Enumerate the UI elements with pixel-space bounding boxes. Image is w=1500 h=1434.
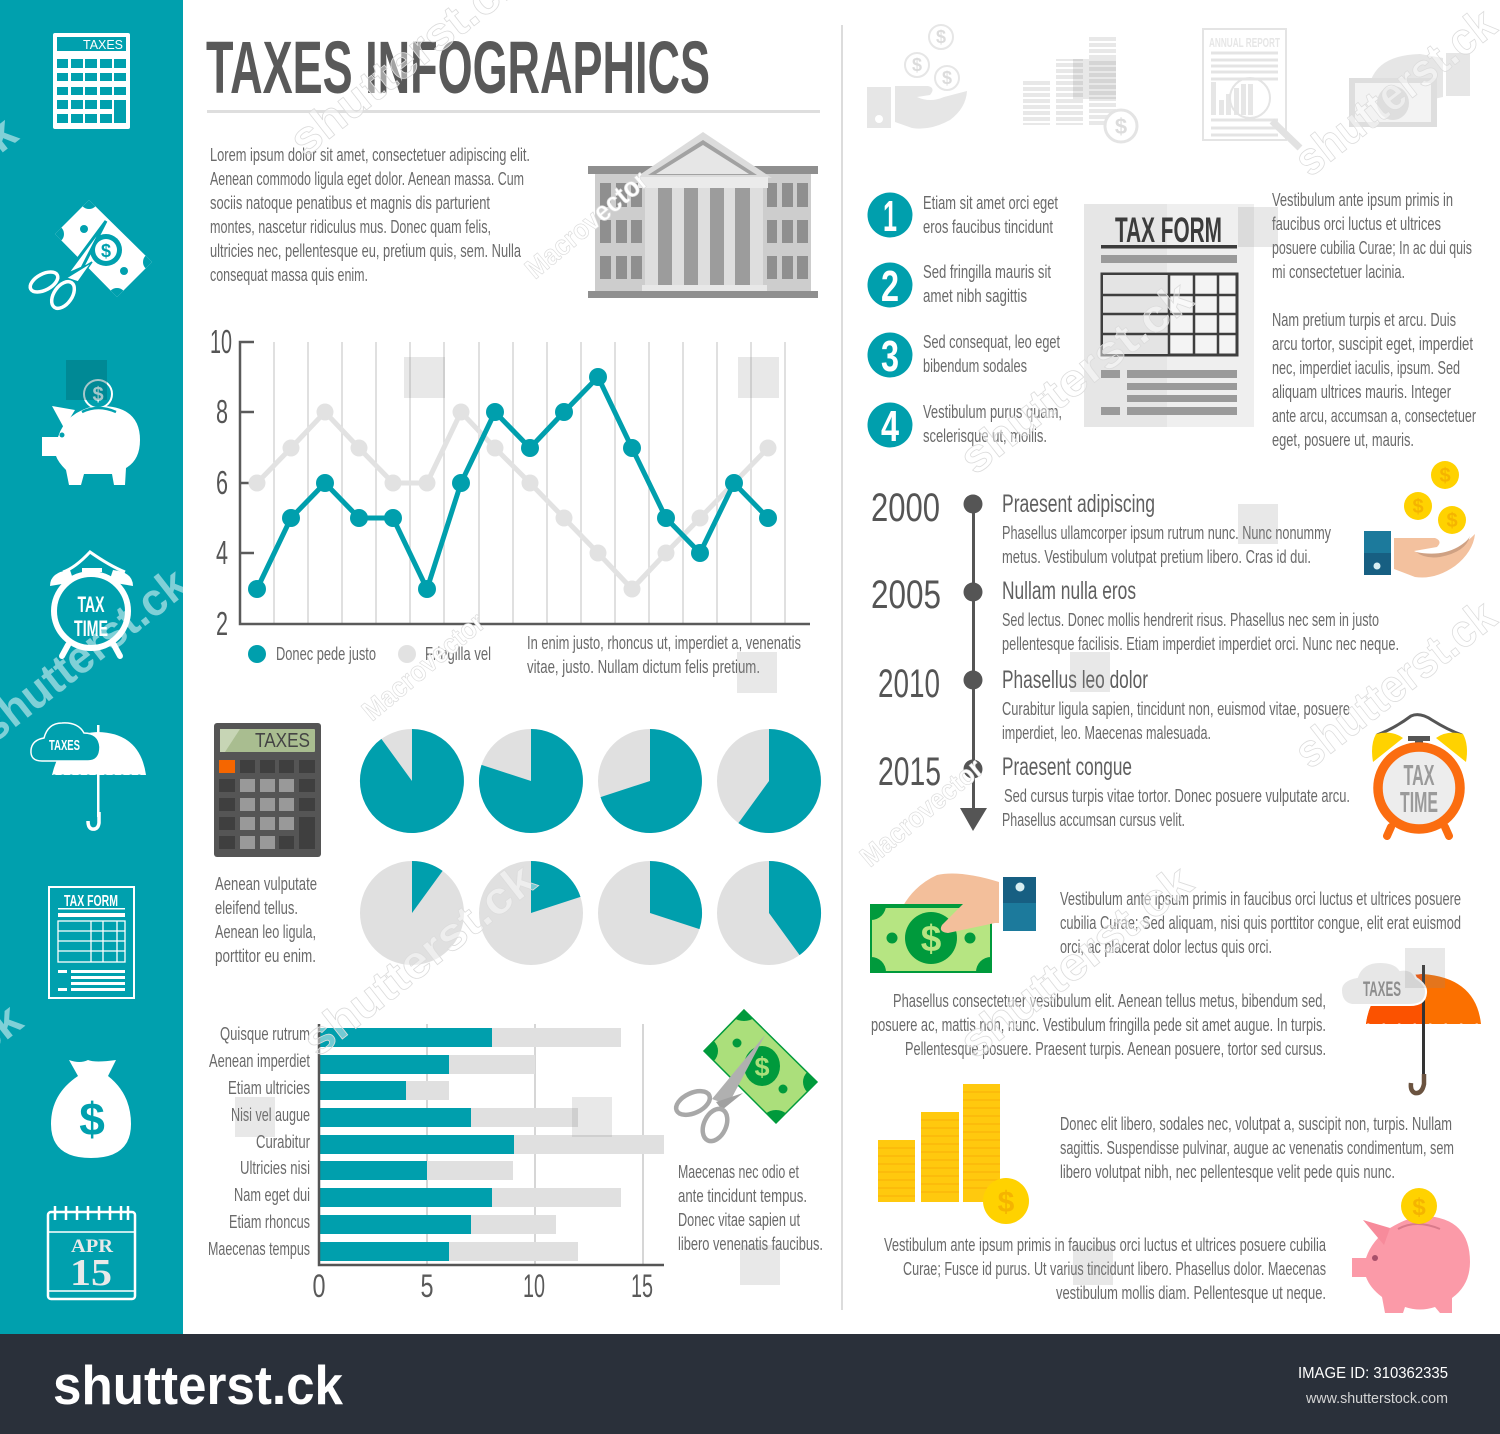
icon: orange umbrella with cloud	[1341, 962, 1481, 1093]
icon: money bag: $	[79, 1093, 105, 1145]
chart legend: Donec pede justo	[276, 644, 376, 664]
chart legend: Fringilla vel	[425, 644, 491, 664]
chart note: In enim justo, rhoncus ut, imperdiet a, venenatis	[527, 633, 801, 653]
timeline entry 2010: imperdiet, leo. Maecenas malesuada.	[1002, 723, 1211, 743]
bar labels: Maecenas tempus	[208, 1239, 310, 1259]
timeline entry 2000: metus. Vestibulum volutpat pretium libero. Cras id dui.	[1002, 547, 1311, 567]
item 2: amet nibh sagittis	[923, 286, 1027, 306]
watermark overlays: Macrovector	[854, 752, 989, 873]
bar labels: Etiam rhoncus	[229, 1212, 310, 1232]
faded icon row	[867, 25, 1470, 148]
icon: tax time clock: TAX	[78, 592, 105, 617]
banknote caption: ante tincidunt tempus.	[678, 1186, 807, 1206]
timeline entry 2000: Praesent adipiscing	[1002, 490, 1155, 518]
item 3: Sed consequat, leo eget	[923, 332, 1060, 352]
calculator caption: Aenean leo ligula,	[215, 922, 316, 942]
item 4: 4	[881, 402, 899, 451]
shutterstock logo: shutterst.ck	[53, 1354, 343, 1416]
icon: hand catching coins	[1364, 461, 1475, 578]
icon: scissors on green banknote: $	[754, 1052, 770, 1082]
intro paragraph: montes, nascetur ridiculus mus. Donec quam felis,	[210, 217, 491, 237]
intro paragraph: consequat massa quis enim.	[210, 265, 368, 285]
icon: april 15 calendar: 15	[70, 1252, 112, 1294]
timeline	[871, 486, 1399, 831]
timeline entry 2000: 2000	[871, 486, 940, 530]
bar labels: Ultricies nisi	[240, 1158, 310, 1178]
watermark overlays: shutterst.ck	[949, 270, 1202, 484]
icon: tax form document: TAX FORM	[1115, 211, 1222, 250]
right text column	[1272, 190, 1476, 450]
watermark overlays: Macrovector	[356, 606, 491, 727]
icon: tax time orange clock: TIME	[1400, 787, 1438, 819]
title: TAXES INFOGRAPHICS	[206, 26, 710, 109]
calculator caption: eleifend tellus.	[215, 898, 298, 918]
teal series	[248, 368, 777, 598]
y axis labels	[210, 323, 232, 642]
item 3	[868, 332, 1060, 381]
bar labels: Quisque rutrum	[220, 1024, 310, 1044]
icon: faded coin stacks	[1023, 37, 1137, 142]
right text column: eget, posuere ut, mauris.	[1272, 430, 1414, 450]
text block: umbrella: Phasellus consectetuer vestibulum elit. Aenean tellus metus, bibendum sed,	[893, 991, 1326, 1011]
text block: piggy bank: Vestibulum ante ipsum primis in faucibus orci luctus et ultrices posuere cubilia	[884, 1235, 1327, 1255]
text block: piggy bank: vestibulum mollis diam. Pellentesque ut neque.	[1056, 1283, 1326, 1303]
bar labels: Etiam ultricies	[228, 1078, 310, 1098]
line chart	[210, 323, 810, 642]
bar labels: Nam eget dui	[234, 1185, 310, 1205]
grey series	[248, 404, 776, 598]
bar labels: Curabitur	[256, 1132, 310, 1152]
timeline entry 2015: Sed cursus turpis vitae tortor. Donec posuere vulputate arcu.	[1004, 786, 1350, 806]
text block: piggy bank: Curae; Fusce id purus. Ut varius tincidunt libero. Phasellus dolor. Maecenas	[903, 1259, 1326, 1279]
timeline entry 2000: Phasellus ullamcorper ipsum rutrum nunc. Nunc nonummy	[1002, 523, 1331, 543]
intro paragraph: ultricies nec, pellentesque eu, pretium quis, sem. Nulla	[210, 241, 522, 261]
icon: hand catching coins: $	[1412, 496, 1424, 518]
icon: faded hand and money	[1349, 53, 1470, 127]
item 2	[868, 262, 1051, 311]
bar axis labels: 0	[312, 1268, 326, 1304]
calculator caption: porttitor eu enim.	[215, 946, 316, 966]
icon: government building	[588, 132, 818, 298]
intro paragraph: Lorem ipsum dolor sit amet, consectetuer adipiscing elit.	[210, 145, 530, 165]
icon: calculator	[214, 723, 321, 857]
icon: piggy bank with coin	[42, 380, 140, 485]
icon: hand catching coins: $	[1446, 510, 1458, 532]
icon: gold coin stacks: $	[998, 1186, 1015, 1219]
icon: umbrella with cloud: TAXES	[49, 737, 80, 754]
calculator caption	[215, 874, 317, 966]
item 3: bibendum sodales	[923, 356, 1027, 376]
bar labels: Nisi vel augue	[231, 1105, 310, 1125]
item 1: eros faucibus tincidunt	[923, 217, 1053, 237]
bar axis labels: 15	[631, 1268, 653, 1304]
chart note: vitae, justo. Nullam dictum felis pretium.	[527, 657, 760, 677]
bar labels	[208, 1024, 310, 1259]
item 4: Vestibulum purus quam,	[923, 402, 1062, 422]
icon: gold coin stacks	[878, 1084, 1029, 1224]
timeline entry 2010: Curabitur ligula sapien, tincidunt non, euismod vitae, posuere	[1002, 699, 1350, 719]
item 2: Sed fringilla mauris sit	[923, 262, 1051, 282]
icon: tax time clock	[50, 552, 133, 656]
intro paragraph: Aenean commodo ligula eget dolor. Aenean massa. Cum	[210, 169, 524, 189]
icon: faded hand with coins: $	[912, 55, 922, 75]
icon: tax form: TAX FORM	[64, 893, 118, 910]
timeline entry 2005: 2005	[871, 573, 941, 617]
y axis labels: 8	[216, 393, 228, 430]
timeline entry 2005: Nullam nulla eros	[1002, 577, 1136, 605]
y axis labels: 6	[216, 464, 228, 501]
item 4: scelerisque ut, mollis.	[923, 426, 1047, 446]
icon: money bag	[51, 1060, 131, 1158]
timeline entry 2005	[871, 573, 1399, 654]
icon: pink piggy bank: $	[1412, 1194, 1426, 1221]
text block: banknote: orci, ac placerat dolor lectus quis orci.	[1060, 937, 1272, 957]
timeline entry 2015	[878, 750, 1350, 830]
intro paragraph	[210, 145, 530, 285]
timeline entry 2015: Phasellus accumsan cursus velit.	[1002, 810, 1185, 830]
item 3: 3	[881, 332, 899, 381]
watermark overlays: shutterst.ck	[949, 854, 1202, 1068]
banknote caption	[678, 1162, 823, 1254]
item 4	[868, 402, 1062, 451]
y axis labels: 10	[210, 323, 232, 360]
y axis labels: 4	[216, 534, 228, 571]
text block: umbrella	[871, 991, 1326, 1059]
teal bars	[320, 1028, 514, 1261]
chart note	[527, 633, 801, 677]
watermark overlays: Macrovector	[519, 164, 654, 285]
icon: faded annual report: ANNUAL REPORT	[1209, 35, 1280, 50]
bar axis labels: 5	[420, 1268, 434, 1304]
icon: hand catching coins: $	[1439, 465, 1451, 487]
chart legend	[248, 644, 491, 664]
item 1: 1	[883, 192, 897, 241]
right text column: mi consectetuer lacinia.	[1272, 262, 1405, 282]
text block: banknote	[1060, 889, 1461, 957]
icon: faded hand with coins: $	[942, 68, 952, 88]
timeline entry 2010: Phasellus leo dolor	[1002, 666, 1148, 694]
timeline entry 2015: Praesent congue	[1002, 753, 1132, 781]
icon: faded coin stacks: $	[1115, 114, 1127, 139]
grey bars	[320, 1028, 664, 1261]
timeline entry 2000	[871, 486, 1331, 567]
pie charts row 1	[360, 729, 821, 833]
icon: calculator: TAXES	[255, 730, 310, 752]
horizontal bar chart	[208, 1024, 664, 1304]
icon: faded hand with coins: $	[936, 27, 946, 47]
icon: hand with green banknote: $	[921, 918, 942, 959]
intro paragraph: sociis natoque penatibus et magnis dis parturient	[210, 193, 490, 213]
text block: umbrella: posuere ac, mattis non, nunc. Vestibulum fringilla pede sit amet augue. In turpis.	[871, 1015, 1326, 1035]
icon: orange umbrella with cloud: TAXES	[1363, 978, 1401, 1001]
item 2: 2	[881, 262, 899, 311]
banknote caption: Donec vitae sapien ut	[678, 1210, 800, 1230]
image id: IMAGE ID: 310362335	[1298, 1365, 1448, 1382]
y axis labels: 2	[216, 605, 228, 642]
banknote caption: Maecenas nec odio et	[678, 1162, 799, 1182]
bar axis labels: 10	[523, 1268, 545, 1304]
icon: scissors cutting money: $	[101, 241, 111, 261]
icon: scissors on green banknote	[674, 1008, 818, 1144]
icon: tax time orange clock: TAX	[1404, 760, 1435, 792]
timeline entry 2010: 2010	[878, 662, 940, 706]
icon: tax form document	[1084, 204, 1254, 427]
icon: pink piggy bank	[1352, 1188, 1470, 1313]
text block: umbrella: Pellentesque posuere. Praesent turpis. Aenean posuere, tortor sed cursus.	[905, 1039, 1326, 1059]
icon: tax form	[49, 887, 134, 998]
icon: tax table: TAXES	[83, 37, 123, 52]
sidebar panel	[0, 0, 183, 1334]
icon: hand with green banknote	[870, 874, 1036, 973]
item 1	[868, 192, 1058, 241]
icon: april 15 calendar	[48, 1206, 135, 1299]
banknote caption: libero venenatis faucibus.	[678, 1234, 823, 1254]
text block: piggy bank	[884, 1235, 1327, 1303]
footer bar	[0, 1334, 1500, 1434]
text block: coins	[1060, 1114, 1454, 1182]
icon: tax time clock: TIME	[74, 616, 108, 641]
timeline entry 2015: 2015	[878, 750, 941, 794]
icon: piggy bank with coin: $	[92, 384, 104, 406]
bar axis labels	[312, 1268, 653, 1304]
website: www.shutterstock.com	[1305, 1390, 1448, 1407]
calculator caption: Aenean vulputate	[215, 874, 317, 894]
numbered list	[868, 192, 1062, 451]
icon: tax table	[53, 33, 130, 129]
icon: scissors cutting money	[28, 200, 152, 310]
icon: tax time orange clock	[1372, 715, 1467, 836]
icon: umbrella with cloud	[31, 723, 146, 829]
bar labels: Aenean imperdiet	[209, 1051, 310, 1071]
icon: faded annual report	[1203, 29, 1300, 148]
icon: april 15 calendar: APR	[71, 1236, 113, 1257]
icon: faded hand with coins	[867, 25, 967, 129]
watermark overlays: shutterst.ck	[292, 852, 545, 1066]
item 1: Etiam sit amet orci eget	[923, 193, 1058, 213]
timeline entry 2010	[878, 662, 1350, 743]
pie charts row 2	[360, 861, 821, 965]
